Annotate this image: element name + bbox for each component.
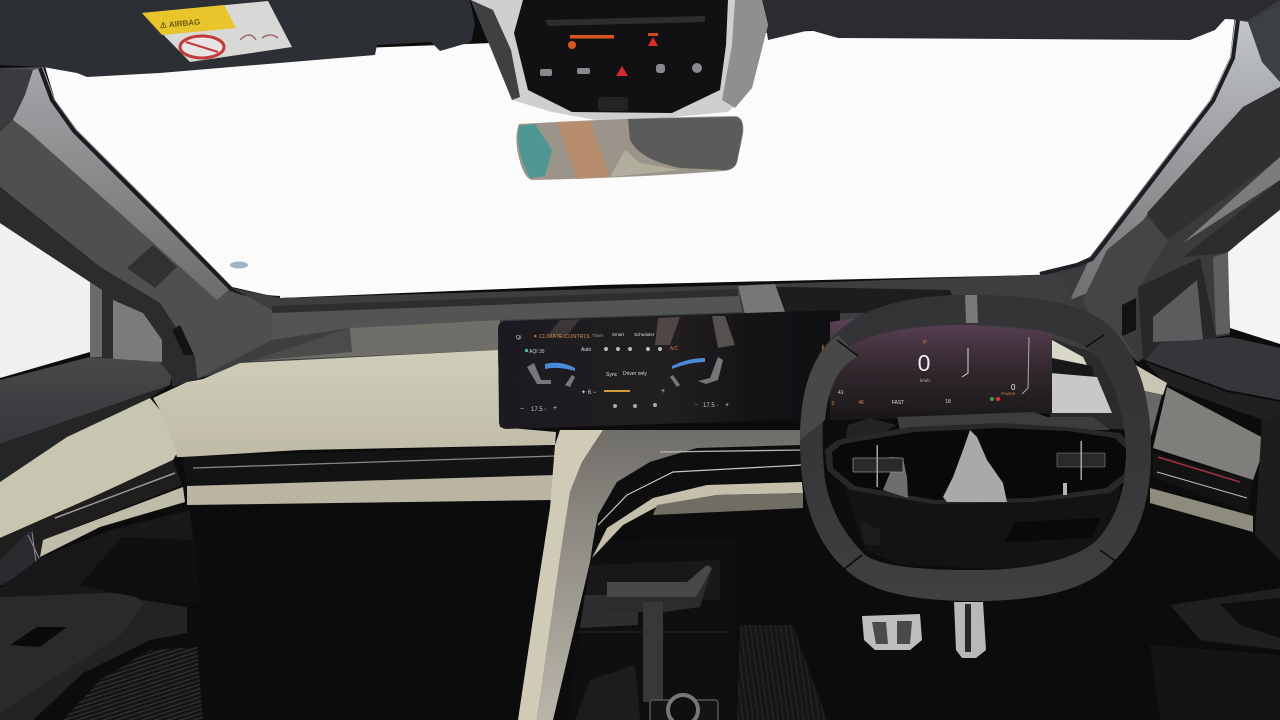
steering wheel hub (825, 423, 1133, 504)
left cross control (853, 445, 903, 487)
door window switch (10, 627, 67, 647)
fan bar (581, 388, 665, 396)
rotary knob (650, 695, 718, 720)
central touchscreen: AQI 35 (529, 349, 545, 355)
central touchscreen: Smart (612, 332, 625, 337)
windshield sensor (230, 262, 248, 268)
central touchscreen: − (694, 402, 698, 409)
cream dashboard (153, 350, 556, 457)
steering wheel rim (800, 295, 1151, 601)
instrument cluster (820, 316, 1052, 420)
door upper lining (0, 510, 200, 600)
climate airflow graphics (545, 358, 705, 371)
pedals (862, 602, 986, 658)
left side window (0, 223, 90, 378)
instrument cluster: 46 (858, 400, 864, 406)
instrument cluster: 18 (945, 399, 951, 405)
steering column (845, 485, 1120, 570)
central touchscreen: − (520, 406, 524, 413)
overhead buttons (540, 63, 702, 76)
airbag warning sticker: ⚠ AIRBAG (159, 17, 201, 30)
instrument cluster: FAST (892, 400, 904, 406)
left door mid dark panel (0, 385, 170, 482)
airbag warning sticker (142, 1, 292, 62)
central touchscreen: Sync (606, 372, 618, 378)
fan bar: + (661, 388, 665, 395)
door lower strip (0, 600, 187, 720)
right side window (1227, 208, 1280, 344)
left A-pillar (0, 67, 280, 387)
dash top grey (197, 274, 1135, 379)
centre console (568, 538, 827, 720)
overhead console (471, 0, 768, 120)
door armrest (0, 593, 143, 713)
dash visible inside wheel right of cluster (1050, 338, 1135, 430)
central touchscreen: Timer (592, 333, 604, 338)
central touchscreen: 17.5 ◦ (703, 403, 718, 409)
windshield (43, 15, 1235, 298)
central touchscreen: Scheduler (634, 332, 655, 337)
overhead orange indicators (570, 35, 614, 38)
brake pedal (862, 614, 922, 650)
central touchscreen: ✦ CLIMATE CONTROL (533, 333, 591, 340)
central touchscreen (498, 310, 840, 429)
central touchscreen: + (553, 405, 557, 412)
sun visor right (762, 0, 1280, 40)
seat icons (527, 357, 723, 387)
right A-pillar (1040, 0, 1280, 362)
left door cream panel (0, 398, 177, 538)
centre grey arch panel (537, 430, 803, 720)
door speaker (63, 647, 203, 720)
right cross control (1057, 441, 1105, 480)
central touchscreen: + (725, 402, 729, 409)
instrument cluster: km/h (920, 378, 930, 383)
accelerator pedal (954, 602, 986, 658)
hub reflection (943, 430, 1007, 502)
instrument cluster: 0 (1011, 383, 1016, 392)
sun visor left with airbag sticker (0, 0, 475, 77)
rear view mirror (516, 116, 743, 180)
left door upper ledge (0, 357, 172, 444)
instrument cluster: 0 (832, 401, 835, 407)
instrument cluster: 0 (918, 350, 930, 376)
central touchscreen: Auto (581, 347, 592, 353)
gear selector (607, 565, 712, 702)
temperature readouts: 17.5 ◦ (531, 407, 546, 413)
fan bar: ✦ 6 − (581, 389, 597, 396)
air vent strip (183, 445, 555, 505)
door pull handle (0, 530, 40, 585)
door dark inset (80, 537, 200, 603)
hazard button (616, 66, 628, 76)
central touchscreen: Driver only (623, 371, 647, 377)
instrument cluster: P (923, 340, 927, 346)
instrument cluster: 41 (838, 390, 844, 396)
right door trim (1127, 337, 1280, 720)
instrument cluster: POWER (1001, 392, 1016, 396)
display hood behind screen (738, 286, 958, 314)
central touchscreen: A/C (670, 346, 679, 352)
left door lower cream strip (40, 487, 185, 557)
centre cream spine (518, 430, 603, 720)
hub top shelf (897, 412, 1110, 430)
left door vent trim (0, 460, 182, 585)
climate header: Qi (516, 335, 522, 341)
